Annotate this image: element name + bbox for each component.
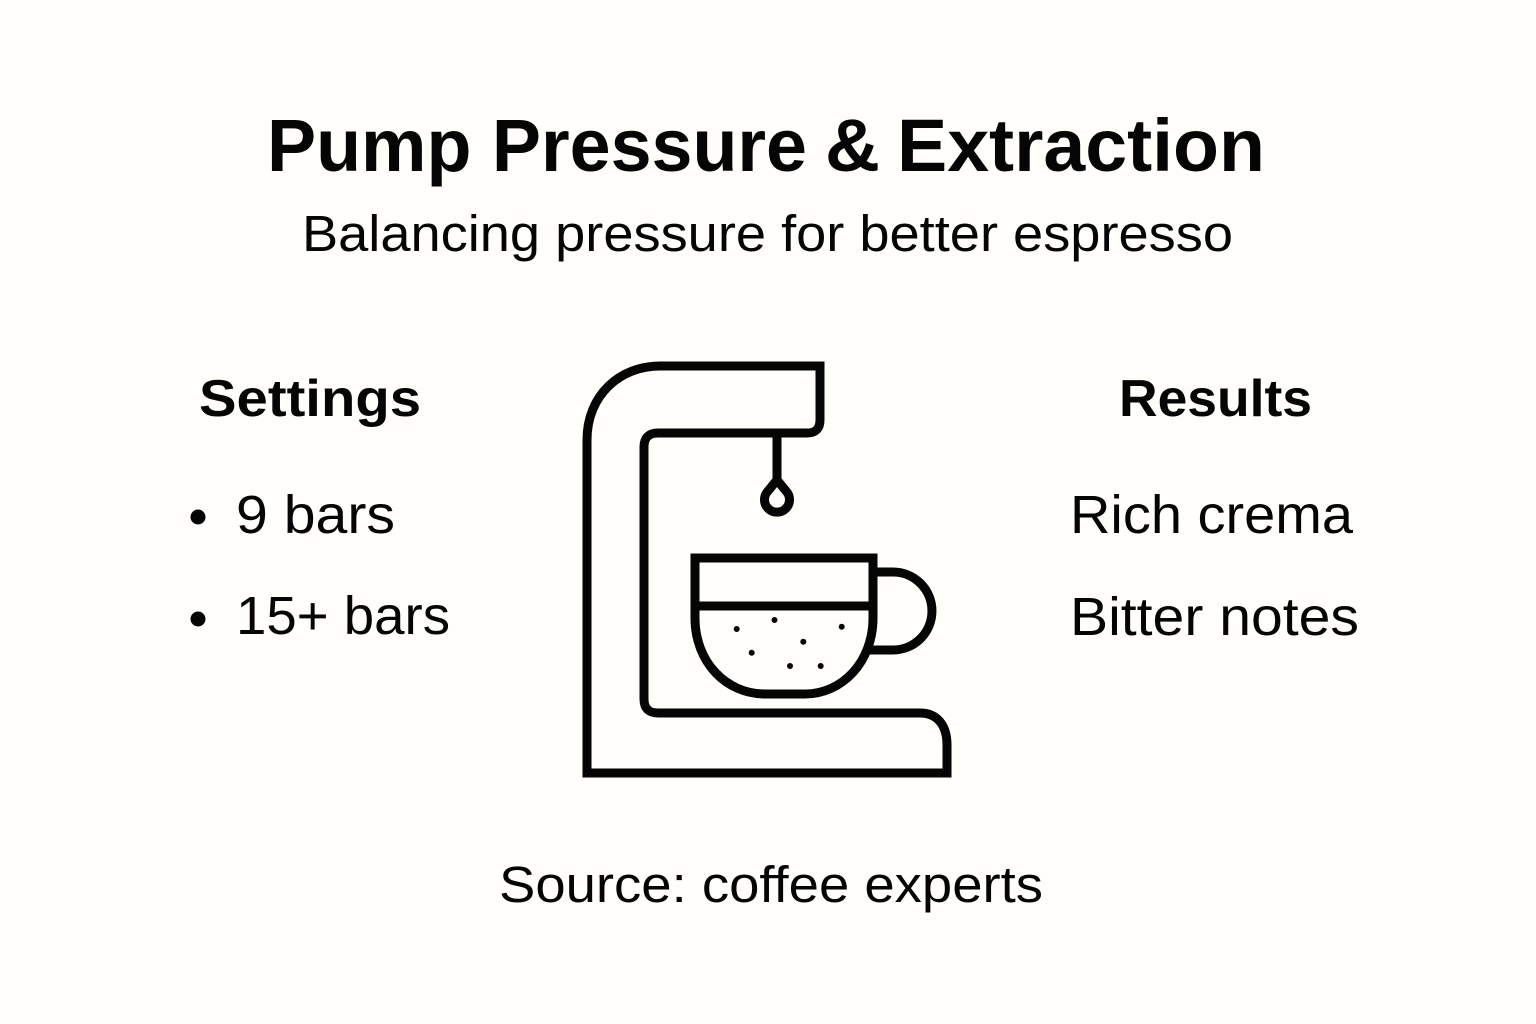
spout and drop xyxy=(764,435,789,512)
source note: Source: coffee experts xyxy=(499,856,1043,913)
list item: 9 bars: 9 bars xyxy=(236,485,395,545)
list item: bitter notes: Bitter notes xyxy=(1070,587,1359,647)
cup xyxy=(695,558,932,694)
heading: results: Results xyxy=(1119,370,1312,428)
subtitle: Balancing pressure for better espresso xyxy=(302,205,1233,262)
title: Extraction xyxy=(897,104,1265,187)
list item: 15+ bars: 15+ bars xyxy=(236,586,450,646)
panel: settings xyxy=(190,370,450,646)
icon: espresso machine with cup xyxy=(587,366,947,773)
title: Pump Pressure xyxy=(267,104,807,187)
list item: rich crema: Rich crema xyxy=(1070,485,1354,545)
title: & xyxy=(825,104,880,187)
machine body xyxy=(587,366,947,773)
heading: settings: Settings xyxy=(199,370,421,428)
title xyxy=(267,104,1265,187)
panel: results xyxy=(1070,370,1359,647)
